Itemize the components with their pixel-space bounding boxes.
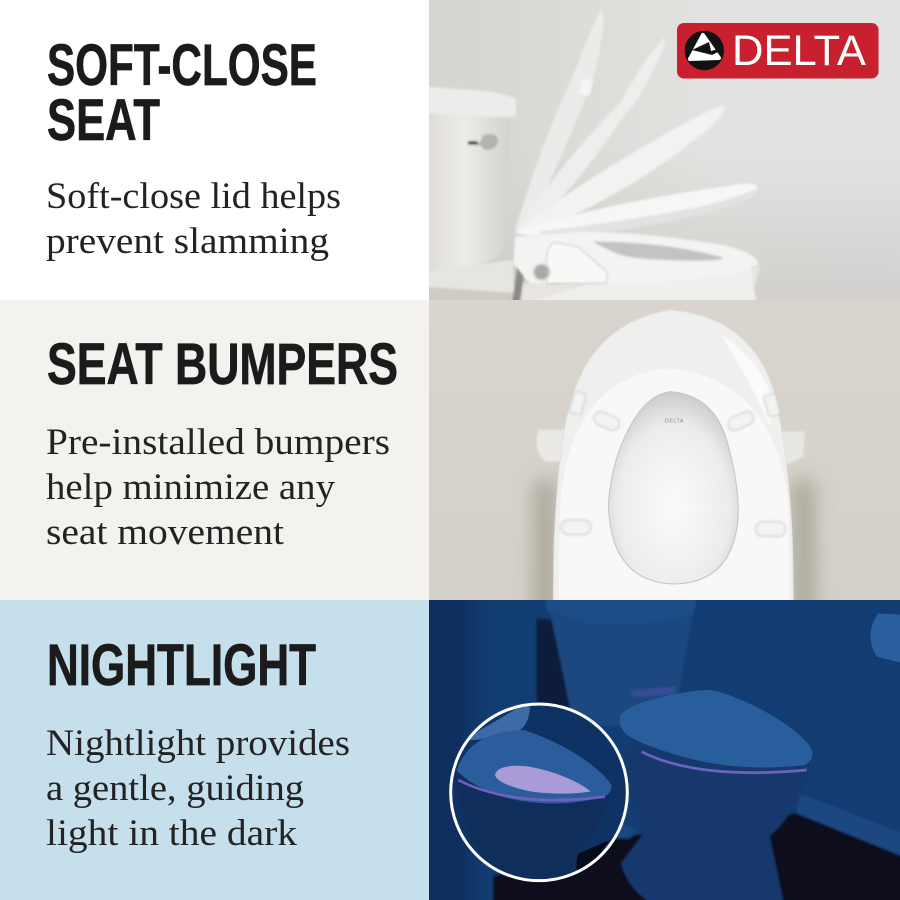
bumpers bbox=[561, 391, 786, 536]
seat ring bbox=[558, 368, 790, 603]
raised lid bbox=[553, 310, 793, 603]
panel: seat bumpers photo illustration bbox=[429, 300, 900, 620]
text: bumpers description bbox=[46, 421, 390, 552]
logo text on seat: DELTA bbox=[665, 418, 684, 424]
text: bumpers description: seat movement bbox=[46, 511, 284, 552]
heading: soft-close seat: SOFT-CLOSE bbox=[47, 33, 317, 98]
lid highlight bbox=[724, 337, 770, 423]
toilet tank bbox=[550, 612, 692, 726]
illuminated bowl bbox=[495, 766, 591, 794]
seat ring and bidet control bbox=[513, 232, 758, 284]
heading: nightlight: NIGHTLIGHT bbox=[47, 633, 316, 698]
text: soft-close description: prevent slamming bbox=[46, 220, 329, 261]
text: nightlight description bbox=[46, 722, 350, 853]
panel: soft-close photo illustration bbox=[427, 0, 900, 303]
open lid edge bbox=[463, 707, 530, 740]
text: nightlight description: light in the dark bbox=[46, 812, 298, 853]
closed lid bbox=[620, 690, 813, 767]
text: soft-close description bbox=[46, 175, 341, 261]
toilet paper holder bbox=[870, 613, 900, 663]
text: nightlight description: a gentle, guiding bbox=[46, 767, 304, 808]
tank edges behind seat bbox=[537, 430, 805, 463]
inset circle with bowl view bbox=[443, 704, 627, 887]
heading: seat bumpers: SEAT BUMPERS bbox=[47, 332, 398, 397]
panel: seat bumpers text bbox=[0, 300, 430, 600]
floor and baseboard bbox=[493, 793, 900, 900]
text: bumpers description: help minimize any bbox=[46, 466, 336, 507]
seat rim bbox=[457, 730, 612, 804]
text: nightlight description: Nightlight provides bbox=[46, 722, 350, 763]
wall shadow bbox=[533, 480, 815, 620]
panel: nightlight photo illustration bbox=[429, 597, 900, 900]
panel: soft-close text bbox=[0, 0, 430, 300]
logo: Delta: DELTA bbox=[732, 27, 866, 75]
toilet bowl and base bbox=[427, 260, 760, 303]
nightlight strip bbox=[642, 752, 807, 773]
logo: Delta bbox=[677, 23, 878, 78]
tank glow bbox=[630, 686, 677, 697]
heading: soft-close seat: SEAT bbox=[47, 88, 160, 153]
text: soft-close description: Soft-close lid helps bbox=[46, 175, 341, 216]
seat opening bbox=[608, 392, 738, 584]
toilet tank bbox=[427, 87, 516, 271]
nightlight strip in inset bbox=[458, 780, 605, 800]
text: bumpers description: Pre-installed bumpers bbox=[46, 421, 390, 462]
panel: nightlight text bbox=[0, 600, 430, 900]
heading: soft-close seat bbox=[47, 33, 317, 153]
open seat positions bbox=[514, 10, 757, 236]
toilet bowl bbox=[620, 814, 790, 900]
icon: Delta triangle mark bbox=[685, 31, 724, 70]
